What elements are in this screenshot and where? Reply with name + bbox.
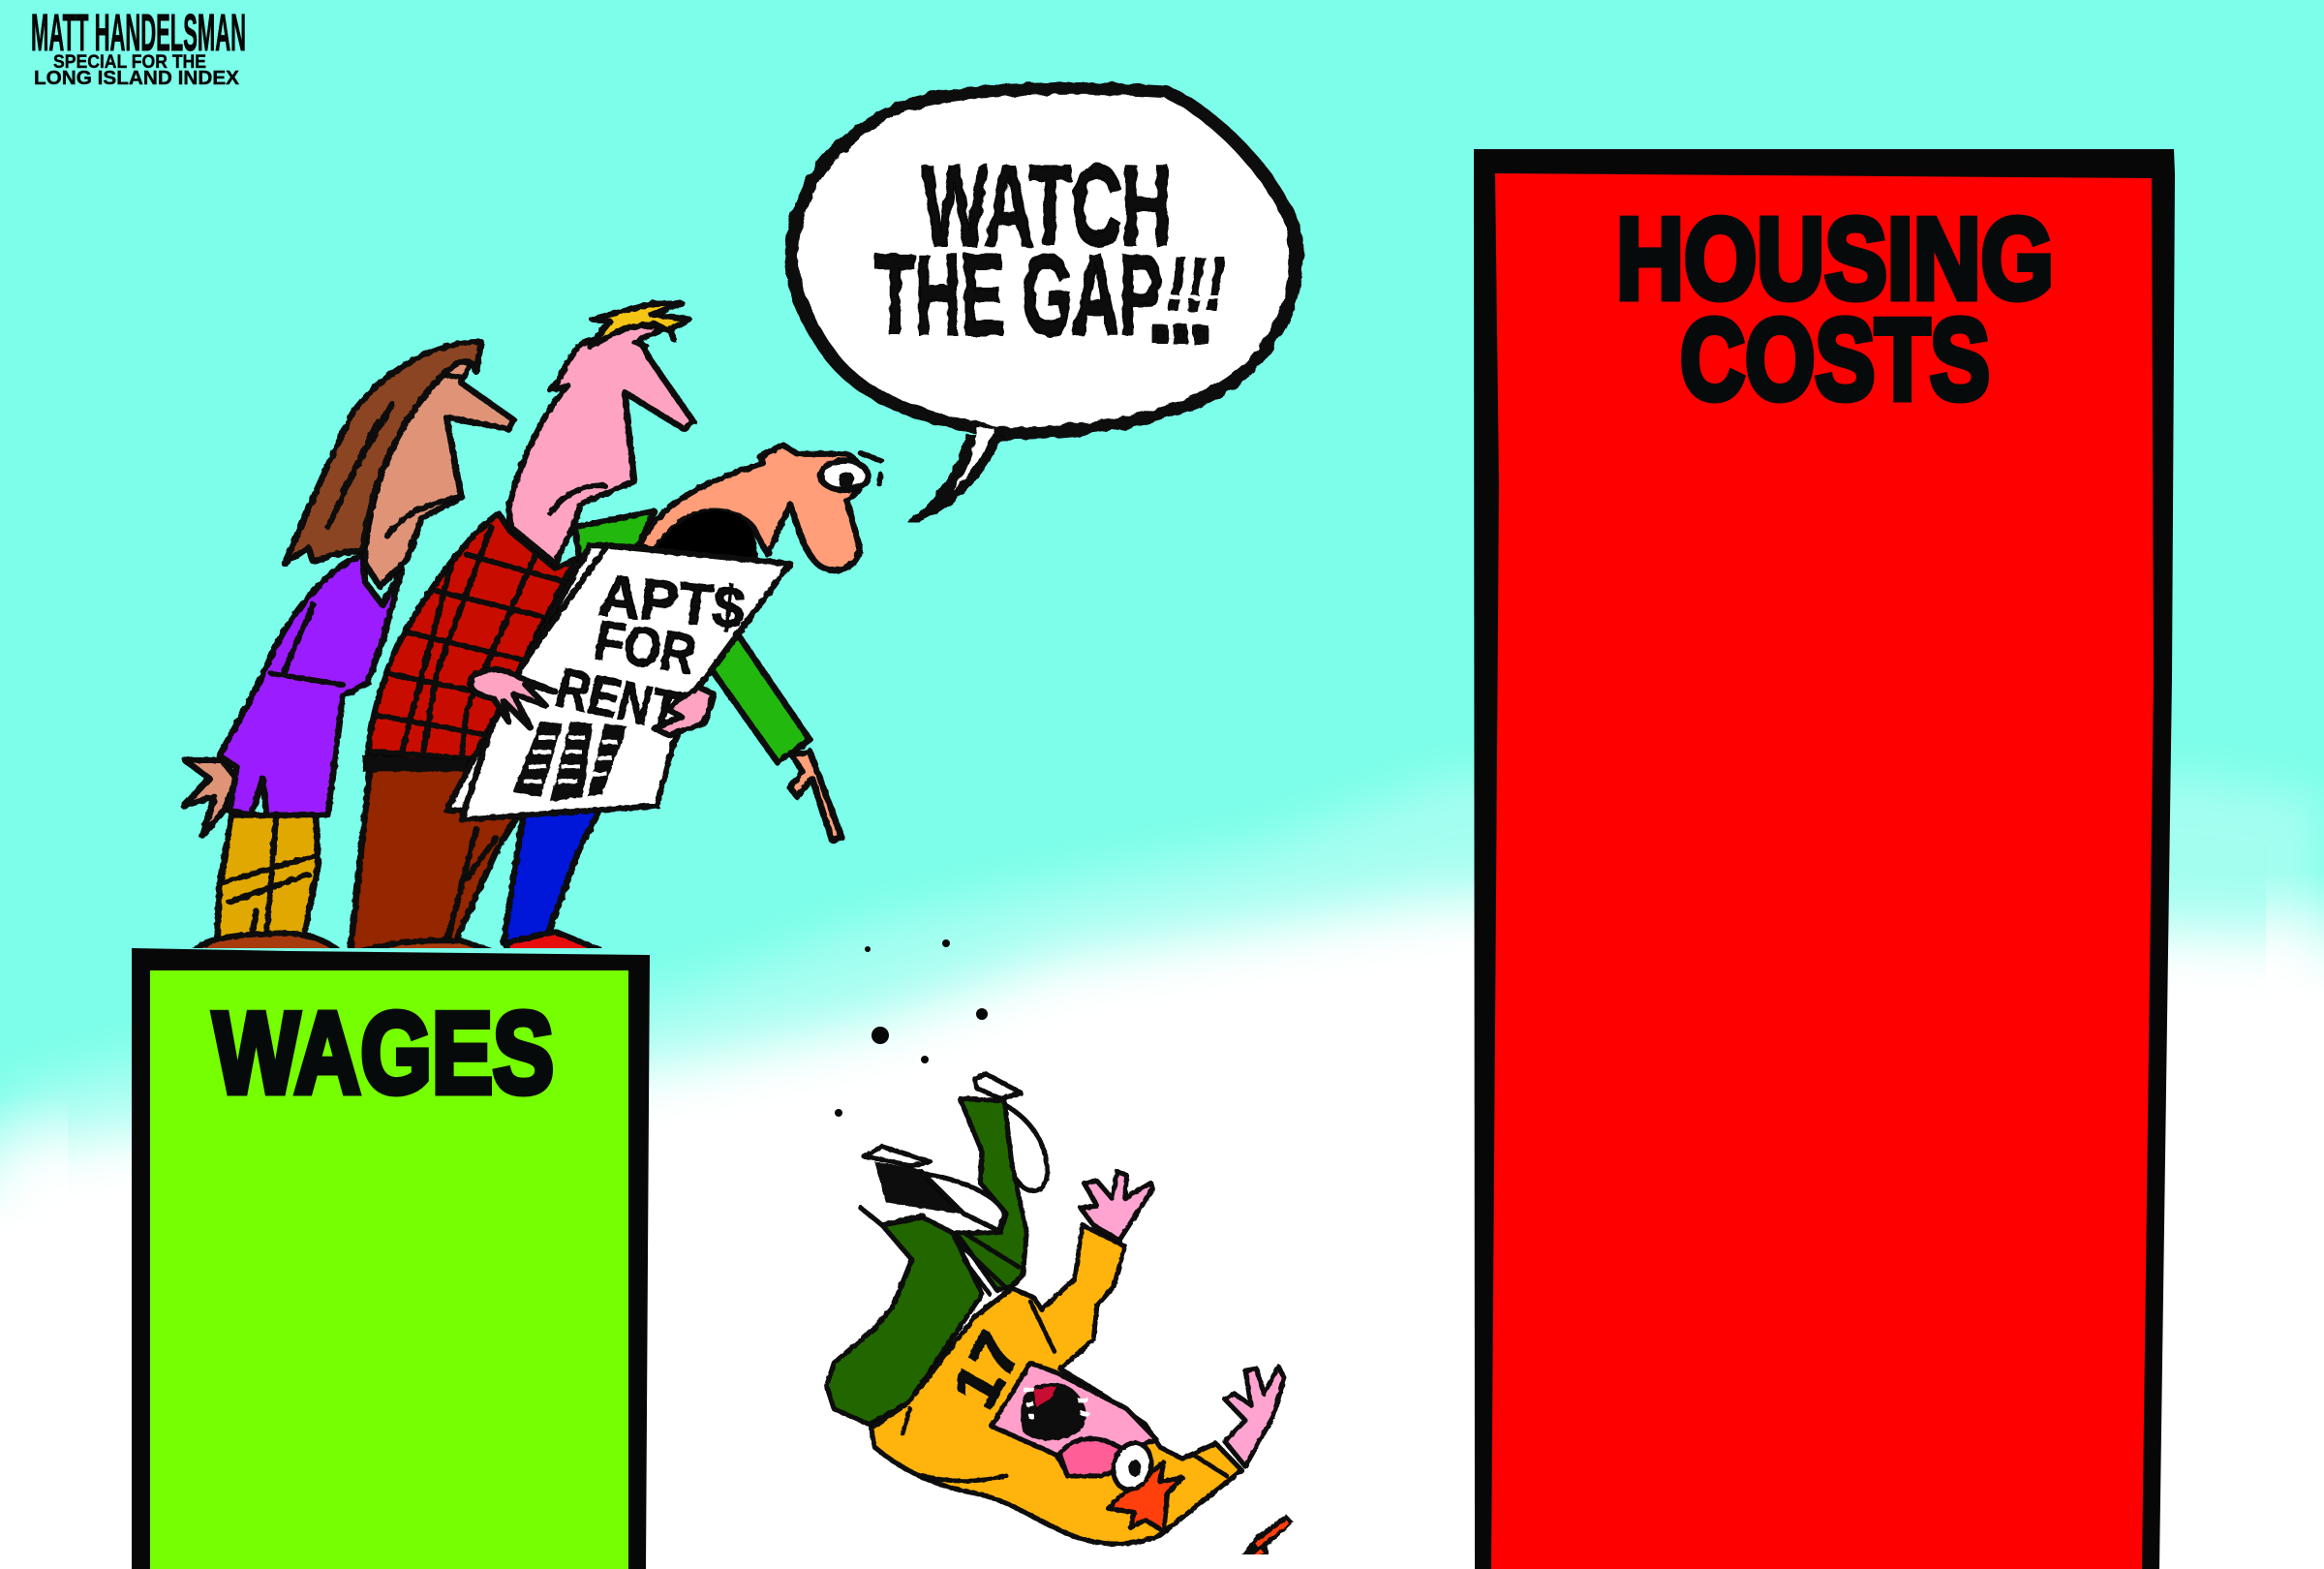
orange object at bottom edge bbox=[1235, 1514, 1294, 1564]
figure: three people on the wages column bbox=[184, 303, 881, 962]
heading: wages: WAGES bbox=[213, 989, 554, 1118]
figure: man with blond hair in plaid shirt bbox=[351, 303, 693, 962]
debris: falling crumbs bbox=[835, 939, 988, 1117]
hand: right hand on paper bbox=[655, 687, 714, 735]
panel: wages column bbox=[132, 948, 650, 1569]
bubble text: watch the gap: ... bbox=[1150, 263, 1210, 360]
newspaper text: APT$ bbox=[596, 563, 749, 642]
bubble text: watch the gap bbox=[875, 142, 1225, 360]
heading: housing costs bbox=[1616, 195, 2054, 424]
signature: artist credit: LONG ISLAND INDEX bbox=[34, 68, 240, 89]
heading: housing costs: COSTS bbox=[1680, 295, 1990, 424]
newspaper text: FOR bbox=[590, 608, 701, 686]
newspaper text: RENT bbox=[550, 657, 686, 743]
hand: left hand on paper bbox=[471, 669, 555, 728]
falling man head bbox=[992, 1363, 1182, 1531]
falling man torso in yellow shirt bbox=[872, 1225, 1241, 1544]
bubble text: watch the gap: WATCH bbox=[922, 142, 1172, 270]
text: MATT HANDELSMAN bbox=[31, 4, 246, 62]
jersey number 17: 17 bbox=[939, 1321, 1035, 1420]
falling man legs and shoes bbox=[827, 1074, 1047, 1425]
newspaper text bbox=[550, 563, 749, 743]
panel: housing costs column bbox=[1474, 149, 2175, 1569]
figure: man falling into the gap bbox=[827, 1074, 1294, 1564]
signature: artist credit: SPECIAL FOR THE bbox=[53, 52, 206, 73]
figure: woman in purple bbox=[184, 342, 513, 962]
speech bubble bbox=[792, 88, 1297, 531]
bubble text: watch the gap: THE GAP bbox=[875, 231, 1162, 359]
falling man hands bbox=[1081, 1172, 1284, 1466]
figure: man in green shouting and pointing down bbox=[575, 445, 881, 841]
heading: housing costs: HOUSING bbox=[1616, 195, 2054, 323]
newspaper: apts for rent bbox=[446, 545, 790, 819]
signature: artist credit bbox=[31, 4, 246, 89]
bubble text: watch the gap: !!! bbox=[1167, 241, 1225, 326]
newspaper listings: building columns bbox=[513, 722, 627, 801]
